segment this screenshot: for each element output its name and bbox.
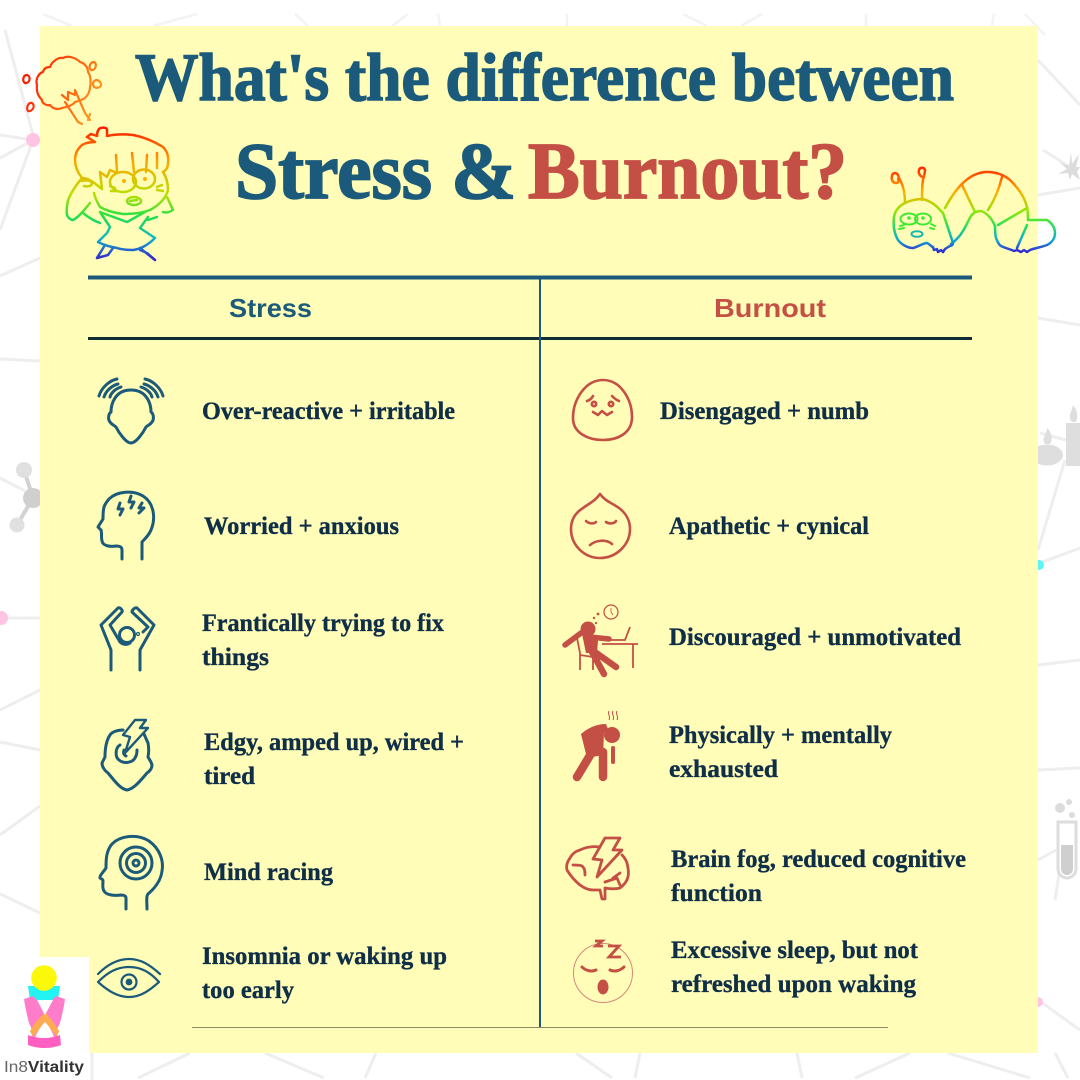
panel: burnout column (565, 380, 966, 1002)
mouth (127, 197, 141, 205)
burner and candle (1031, 405, 1080, 466)
illustration: tired rainbow caterpillar (892, 168, 1055, 252)
hair (87, 128, 168, 172)
text: worried: Worried + anxious (204, 513, 399, 540)
caterpillar mouth (912, 231, 922, 237)
text: frantically: things (202, 644, 269, 671)
text: insomnia: too early (202, 977, 294, 1004)
caterpillar face (899, 214, 935, 229)
text: edgy: Edgy, amped up, wired + (204, 729, 464, 756)
chair and desk (577, 627, 638, 670)
ears and arms (67, 178, 92, 220)
caterpillar body (945, 172, 1055, 252)
logo: In8Vitality (0, 957, 89, 1080)
head (894, 199, 943, 248)
text: exhausted (669, 722, 892, 783)
logo wordmark: In8Vitality (4, 1059, 84, 1076)
text: excessive sleep: refreshed upon waking (671, 971, 916, 998)
title (135, 39, 954, 216)
text: insomnia: Insomnia or waking up (202, 943, 447, 970)
column heading: burnout: Burnout (714, 293, 826, 323)
icon: tired hunched person (577, 711, 620, 777)
text: discouraged: Discouraged + unmotivated (669, 624, 961, 651)
text: brain fog: Brain fog, reduced cognitive (671, 846, 966, 873)
illustration: stressed rainbow girl (23, 57, 173, 260)
pink nodes (0, 133, 1044, 1007)
test tube (1055, 799, 1076, 878)
icon: eye (98, 959, 160, 997)
eyes (110, 172, 136, 192)
title word stress: Stress & (235, 128, 516, 216)
caterpillar foot (933, 243, 953, 252)
text: apathetic: Apathetic + cynical (669, 513, 869, 540)
text: insomnia (202, 943, 447, 1004)
icon: brain with lightning (567, 838, 628, 899)
text: disengaged: Disengaged + numb (660, 398, 869, 425)
icon: worried blob face (573, 380, 632, 440)
legs (97, 245, 155, 260)
text: frantically: Frantically trying to fix (202, 610, 444, 637)
molecule (10, 462, 43, 532)
text: brain fog (671, 846, 966, 907)
column heading: stress: Stress (229, 293, 312, 323)
body (83, 212, 157, 250)
icon: head with target (100, 836, 162, 909)
icon: exhausted person at desk (565, 605, 638, 674)
text: frantically (202, 610, 444, 671)
text: edgy: tired (204, 763, 255, 790)
icon: sleeping face (574, 941, 632, 1002)
panel: stress column (98, 379, 464, 1004)
icon: head with lightning strike (102, 720, 152, 790)
text: exhausted: exhausted (669, 756, 778, 783)
text: mind racing: Mind racing (204, 859, 333, 886)
face (94, 172, 168, 214)
icon: droplet sad face (571, 494, 630, 558)
logo mark (24, 965, 65, 1048)
icon: head with vibration waves (99, 379, 163, 443)
text: exhausted: Physically + mentally (669, 722, 892, 749)
text: brain fog: function (671, 880, 762, 907)
icon: hands on head (101, 608, 154, 670)
girl eye pupils (122, 177, 147, 183)
text: excessive sleep: Excessive sleep, but not (671, 937, 919, 964)
text: excessive sleep (671, 937, 919, 998)
text: over-reactive: Over-reactive + irritable (202, 398, 455, 425)
steam cloud (23, 57, 101, 124)
antennae (892, 168, 925, 203)
starburst (1058, 152, 1080, 180)
text: edgy (204, 729, 464, 790)
table rules (88, 276, 972, 1028)
icon: head with lightning thoughts (98, 492, 154, 559)
title line one: What's the difference between (135, 39, 954, 115)
title word burnout: Burnout? (528, 128, 847, 216)
